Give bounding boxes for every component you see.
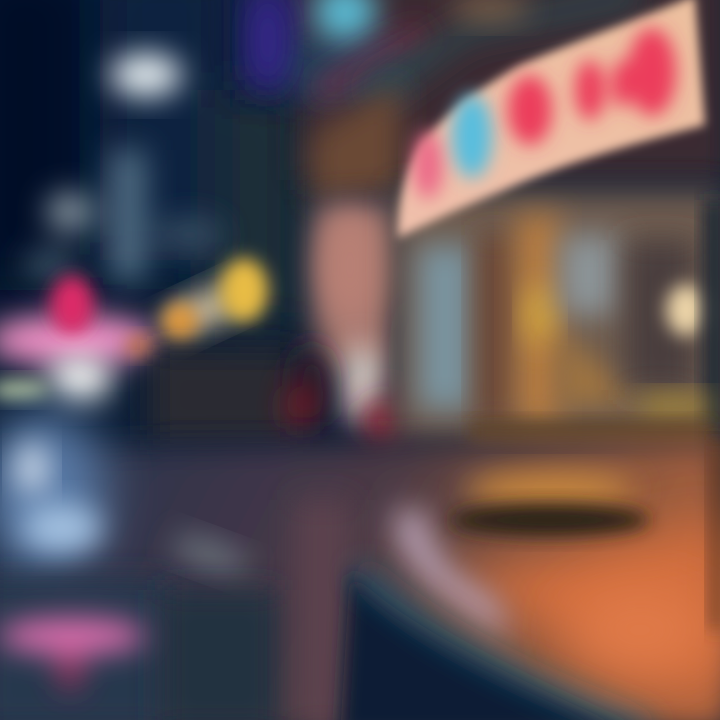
orange ground on the right [440, 520, 720, 700]
dark right edge [710, 440, 720, 630]
mauve reflection in the middle [295, 500, 350, 720]
curved shop sign [398, 0, 705, 238]
central pinkish building [310, 80, 400, 425]
yellow and orange lights [126, 258, 268, 356]
wet street ground [0, 440, 720, 720]
sign: pink character [413, 131, 443, 199]
pink reflection [0, 618, 146, 690]
grey street pole and lights [22, 150, 224, 280]
pale curved reflection [395, 510, 510, 640]
sign: red characters [508, 28, 676, 145]
shop interior on the right [395, 190, 720, 460]
dark and red figures [285, 300, 437, 446]
pink neon figure on the left [0, 275, 157, 402]
dark oval planter [450, 472, 650, 536]
left dark sky and buildings [0, 0, 305, 330]
street level shopfronts mid left [150, 350, 300, 440]
dark teal kerb [340, 570, 640, 720]
white street light [110, 53, 182, 97]
reflections on the left [0, 410, 280, 720]
upper centre neon canopy [240, 0, 720, 180]
sign: blue character [452, 94, 492, 178]
